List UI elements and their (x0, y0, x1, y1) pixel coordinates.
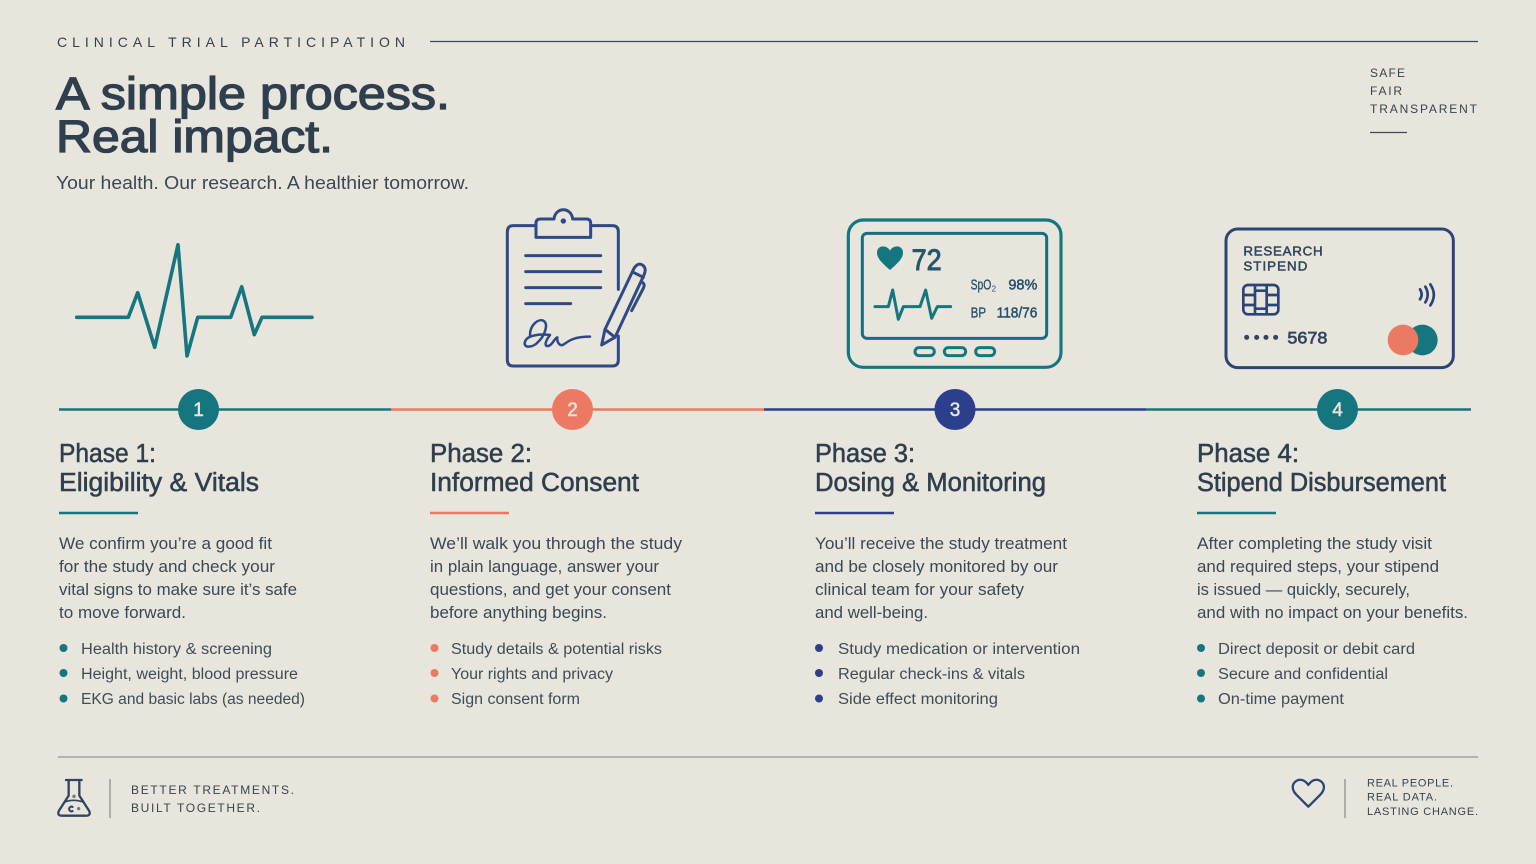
panel: phase 1 (59, 440, 305, 708)
text: phase 1 description: for the study and check your (59, 558, 276, 576)
list: phase 3 bullets: Regular check-ins & vitals (838, 666, 1025, 683)
list: phase 3 bullets: Study medication or intervention (838, 641, 1080, 658)
list: phase 1 bullets (60, 641, 305, 708)
text: phase 2 description: before anything begins. (430, 604, 607, 622)
panel: phase 3 (815, 440, 1080, 708)
tagline: safe fair transparent (1370, 66, 1478, 132)
text: phase 3 description: and well-being. (815, 604, 928, 622)
icon: heartbeat line (77, 245, 312, 356)
step marker 4 (1317, 389, 1358, 430)
list: phase 2 bullets: Sign consent form (451, 691, 580, 708)
text: phase 4 description: and required steps, your stipend (1197, 558, 1439, 576)
tagline: safe fair transparent: FAIR (1370, 84, 1402, 98)
title: Real impact. (56, 111, 333, 162)
list: phase 2 bullets: Your rights and privacy (451, 666, 613, 683)
tagline: safe fair transparent: SAFE (1370, 66, 1405, 80)
heading: phase 1 (59, 440, 259, 513)
step marker 2: 2 (567, 400, 578, 421)
icon: vital signs monitor: SpO (971, 277, 991, 293)
footer text right: REAL DATA. (1367, 792, 1437, 804)
list: phase 2 bullets (430, 641, 662, 708)
heading: phase 3 (815, 440, 1046, 513)
text: phase 3 description (815, 535, 1067, 622)
heading: phase 2: Informed Consent (430, 469, 639, 497)
icon: research stipend card: 5678 (1287, 328, 1327, 347)
list: phase 4 bullets (1197, 641, 1415, 708)
step marker 1: 1 (193, 400, 204, 421)
text: phase 2 description: questions, and get your consent (430, 581, 671, 599)
text: phase 4 description: After completing the study visit (1197, 535, 1432, 553)
footer text left: BUILT TOGETHER. (131, 801, 260, 815)
tagline: safe fair transparent: TRANSPARENT (1370, 102, 1478, 116)
timeline (59, 389, 1471, 430)
heading: phase 2: Phase 2: (430, 440, 532, 468)
icon: flask (58, 780, 90, 816)
text: phase 1 description: We confirm you’re a good fit (59, 535, 272, 553)
text: phase 3 description: You’ll receive the study treatment (815, 535, 1067, 553)
icon: research stipend card (1226, 229, 1453, 368)
footer text left: BETTER TREATMENTS. (131, 783, 294, 797)
icon: vital signs monitor: 98% (1008, 277, 1037, 293)
footer text right: LASTING CHANGE. (1367, 806, 1478, 818)
text: phase 1 description (59, 535, 297, 622)
heading: phase 4: Stipend Disbursement (1197, 469, 1446, 497)
header eyebrow: CLINICAL TRIAL PARTICIPATION (57, 34, 405, 50)
list: phase 4 bullets: Secure and confidential (1218, 666, 1388, 683)
icon: heart outline (1293, 780, 1324, 807)
list: phase 3 bullets (815, 641, 1080, 708)
list: phase 1 bullets: Height, weight, blood pressure (81, 666, 298, 683)
footer text left (131, 783, 294, 815)
step marker 3 (934, 389, 976, 430)
icon: research stipend card: STIPEND (1243, 259, 1307, 274)
footer text right: REAL PEOPLE. (1367, 778, 1453, 790)
subtitle: Your health. Our research. A healthier tomorrow. (56, 172, 469, 193)
panel: phase 4 (1197, 440, 1468, 708)
list: phase 1 bullets: EKG and basic labs (as needed) (81, 691, 305, 708)
title: A simple process. (56, 68, 450, 119)
list: phase 4 bullets: Direct deposit or debit card (1218, 641, 1415, 658)
heading: phase 1: Phase 1: (59, 440, 156, 468)
icon: vital signs monitor: 72 (912, 244, 942, 277)
list: phase 3 bullets: Side effect monitoring (838, 691, 998, 708)
icon: vital signs monitor: BP (971, 305, 986, 321)
list: phase 1 bullets: Health history & screening (81, 641, 272, 658)
icon: clipboard with pen (507, 210, 645, 366)
heading: phase 4 (1197, 440, 1446, 513)
list: phase 4 bullets: On-time payment (1218, 691, 1345, 708)
text: phase 2 description (430, 535, 683, 622)
title (56, 68, 450, 162)
text: phase 2 description: in plain language, answer your (430, 558, 660, 576)
text: phase 1 description: vital signs to make sure it’s safe (59, 581, 297, 599)
step marker 3: 3 (950, 400, 960, 421)
heading: phase 2 (430, 440, 639, 513)
icon: vital signs monitor: 2 (992, 285, 997, 294)
text: phase 4 description: and with no impact on your benefits. (1197, 604, 1468, 622)
list: phase 2 bullets: Study details & potential risks (451, 641, 662, 658)
icon: research stipend card: RESEARCH (1243, 243, 1323, 258)
text: phase 4 description: is issued — quickly, securely, (1197, 581, 1410, 599)
icon: vital signs monitor: 118/76 (997, 305, 1037, 321)
step marker 1 (178, 389, 219, 430)
text: phase 3 description: and be closely monitored by our (815, 558, 1059, 576)
text: phase 2 description: We’ll walk you through the study (430, 535, 683, 553)
panel: phase 2 (430, 440, 683, 708)
heading: phase 3: Phase 3: (815, 440, 915, 468)
heading: phase 4: Phase 4: (1197, 440, 1299, 468)
text: phase 1 description: to move forward. (59, 604, 186, 622)
heading: phase 3: Dosing & Monitoring (815, 469, 1046, 497)
step marker 2 (552, 389, 593, 430)
step marker 4: 4 (1332, 400, 1343, 421)
heading: phase 1: Eligibility & Vitals (59, 469, 259, 497)
text: phase 4 description (1197, 535, 1468, 622)
footer text right (1367, 778, 1478, 818)
icon: vital signs monitor (848, 220, 1061, 367)
text: phase 3 description: clinical team for your safety (815, 581, 1025, 599)
